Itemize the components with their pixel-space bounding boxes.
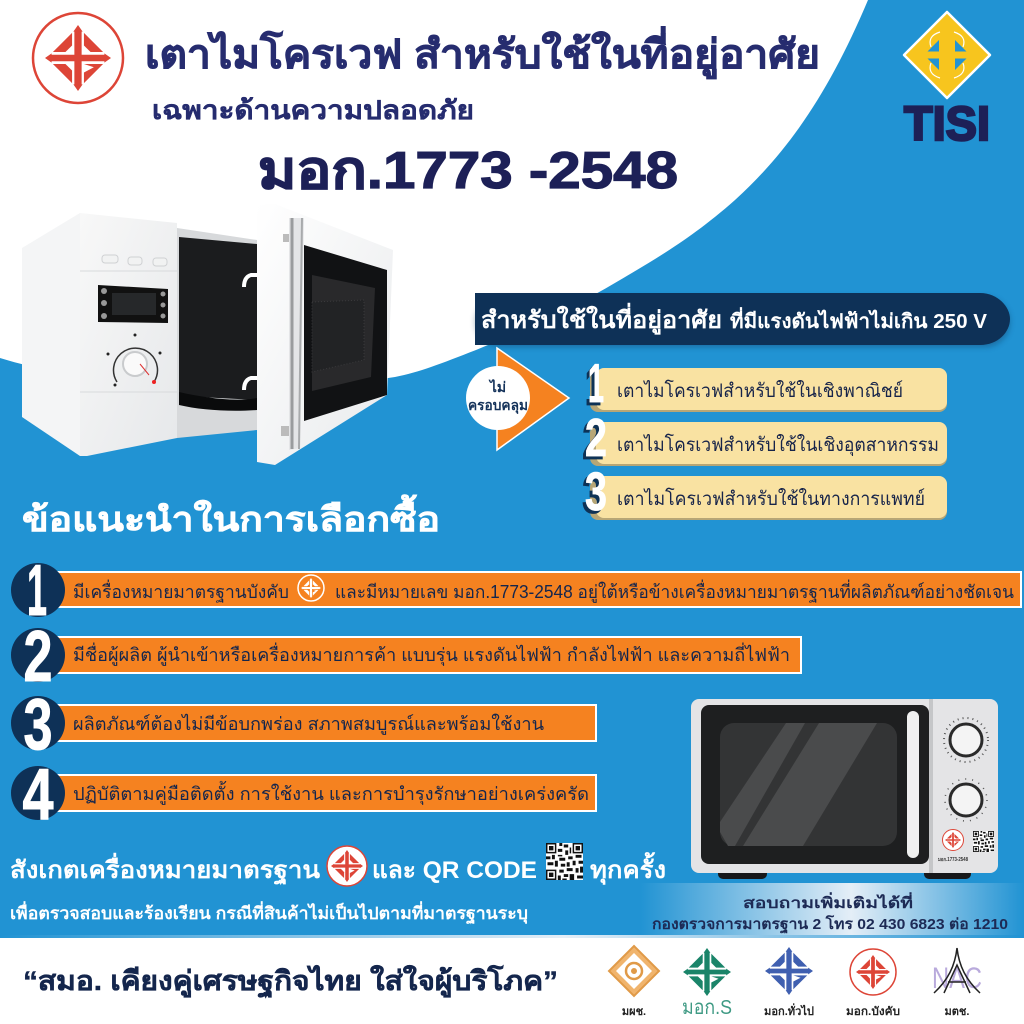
advice 2: มีชื่อผู้ผลิต ผู้นำเข้าหรือเครื่องหมายการค้า แบบรุ่น แรงดันไฟฟ้า กำลังไฟฟ้า และความถี่ไฟฟ้า [73,642,790,666]
logo: mandatory: มอก.บังคับ [846,1005,900,1018]
logo: Thai industrial mark: มตช. [945,1006,969,1018]
advice 1: และมีหมายเลข มอก.1773-2548 อยู่ใต้หรือข้างเครื่องหมายมาตรฐานที่ผลิตภัณฑ์อย่างชัดเจน [335,579,1014,603]
arrow: not covered: ครอบคลุม [468,397,528,414]
logo: red standard mark [33,13,123,103]
advice 3: ผลิตภัณฑ์ต้องไม่มีข้อบกพร่อง สภาพสมบูรณ์และพร้อมใช้งาน [73,713,544,735]
contact box: กองตรวจการมาตรฐาน 2 โทร 02 430 6823 ต่อ 1210 [652,914,1008,934]
advice 1 [11,551,1021,631]
banner: scope: สำหรับใช้ในที่อยู่อาศัย [481,302,722,335]
slogan: “สมอ. เคียงคู่เศรษฐกิจไทย ใส่ใจผู้บริโภค” [23,964,558,999]
logo: community standard: มผช. [622,1006,646,1018]
advice 3: 3 [24,685,52,765]
logo: TISI [904,12,990,151]
list item 3: medical: เตาไมโครเวฟสำหรับใช้ในทางการแพทย์ [617,487,925,510]
logo: mandatory [846,949,900,1018]
logo: voluntary S: มอก.S [682,997,732,1019]
banner: scope [475,293,1010,347]
note: look for mark and QR: ทุกครั้ง [590,851,666,886]
illustration: microwave with mark [691,699,998,879]
illustration: microwave with mark: มอก.1773-2548 [938,857,968,863]
illustration: open white microwave [22,204,393,465]
advice 2: 2 [24,617,52,697]
standard number: มอก.1773 -2548 [258,142,678,200]
advice 3 [11,685,596,765]
list item 3: medical: 3 [585,462,607,522]
logo: community standard [609,946,659,1018]
logo: Thai industrial mark [932,948,982,1018]
list item 3: medical [585,462,947,522]
advice 2 [11,617,801,697]
heading: buying advice: ข้อแนะนำในการเลือกซื้อ [22,494,440,539]
arrow: not covered: ไม่ [488,378,506,395]
title: เตาไมโครเวฟ สำหรับใช้ในที่อยู่อาศัย [145,26,820,79]
note: look for mark and QR [10,843,666,886]
banner: scope: ที่มีแรงดันไฟฟ้าไม่เกิน 250 V [730,306,988,333]
subtitle: เฉพาะด้านความปลอดภัย [152,95,474,125]
contact box: สอบถามเพิ่มเติมได้ที่ [743,892,913,912]
contact box [640,883,1024,937]
note: verification text: เพื่อตรวจสอบและร้องเรียน กรณีที่สินค้าไม่เป็นไปตามที่มาตรฐานระบุ [10,901,528,925]
advice 4 [11,755,596,835]
list item 1: commercial: เตาไมโครเวฟสำหรับใช้ในเชิงพาณิชย์ [617,379,903,402]
arrow: not covered [466,348,569,450]
list item 1: commercial: 1 [588,352,604,414]
list item 1: commercial [588,352,947,414]
logo: general: มอก.ทั่วไป [764,1003,814,1018]
advice 1: 1 [27,551,47,631]
list item 2: industrial: 2 [585,408,607,468]
advice 1: มีเครื่องหมายมาตรฐานบังคับ [73,579,289,603]
logo: Thai industrial mark: NAC [932,962,982,995]
note: look for mark and QR: สังเกตเครื่องหมายมาตรฐาน [10,852,321,886]
list item 2: industrial: เตาไมโครเวฟสำหรับใช้ในเชิงอุตสาหกรรม [617,433,939,457]
logo: TISI: TISI [904,98,990,151]
note: look for mark and QR: และ QR CODE [372,857,537,884]
advice 4: 4 [22,755,54,835]
logo: general [764,947,814,1018]
logo: voluntary S [682,948,732,1019]
advice 4: ปฏิบัติตามคู่มือติดตั้ง การใช้งาน และการบำรุงรักษาอย่างเคร่งครัด [73,781,589,805]
list item 2: industrial [585,408,947,468]
footer [0,935,1024,1024]
